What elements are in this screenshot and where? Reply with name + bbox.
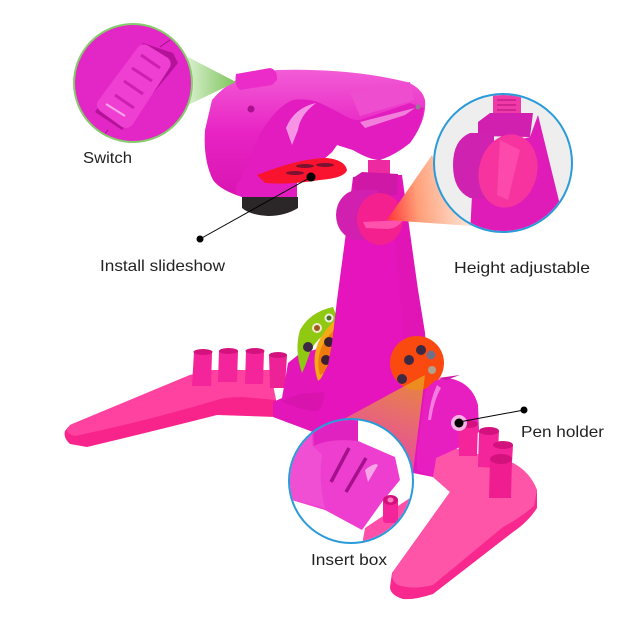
right pen pegs bbox=[458, 420, 513, 498]
callout circle: knob detail bbox=[434, 94, 572, 235]
label: height adjustable: Height adjustable bbox=[454, 260, 590, 277]
product infographic bbox=[64, 23, 604, 600]
pen holder housing bbox=[417, 375, 479, 477]
left base foot bbox=[65, 370, 276, 447]
leader: pen holder bbox=[451, 406, 528, 431]
slide discs: green and yellow bbox=[297, 307, 345, 381]
neck bbox=[353, 160, 398, 197]
head switch button bbox=[236, 68, 277, 90]
slideshow disc in head bbox=[257, 158, 347, 184]
label: pen holder: Pen holder bbox=[521, 424, 605, 441]
callout cone: switch bbox=[188, 57, 236, 105]
label: install slideshow: Install slideshow bbox=[100, 258, 225, 275]
label: insert box: Insert box bbox=[311, 552, 387, 569]
leader: install slideshow bbox=[196, 172, 316, 242]
adjustment knob bbox=[336, 190, 403, 245]
callout cone: insert box bbox=[342, 375, 425, 472]
projector head bbox=[205, 70, 425, 197]
slide disc: orange bbox=[390, 336, 444, 390]
tower stand bbox=[281, 175, 436, 477]
rear base hump bbox=[273, 340, 345, 440]
callout circle: switch detail bbox=[74, 24, 192, 142]
callout circle: insert box detail bbox=[285, 415, 413, 545]
label: switch: Switch bbox=[83, 150, 132, 167]
callout cone: height adjustable bbox=[387, 155, 472, 226]
left pen pegs bbox=[192, 348, 287, 388]
black lens ring bbox=[242, 197, 298, 216]
right base foot bbox=[390, 448, 537, 599]
